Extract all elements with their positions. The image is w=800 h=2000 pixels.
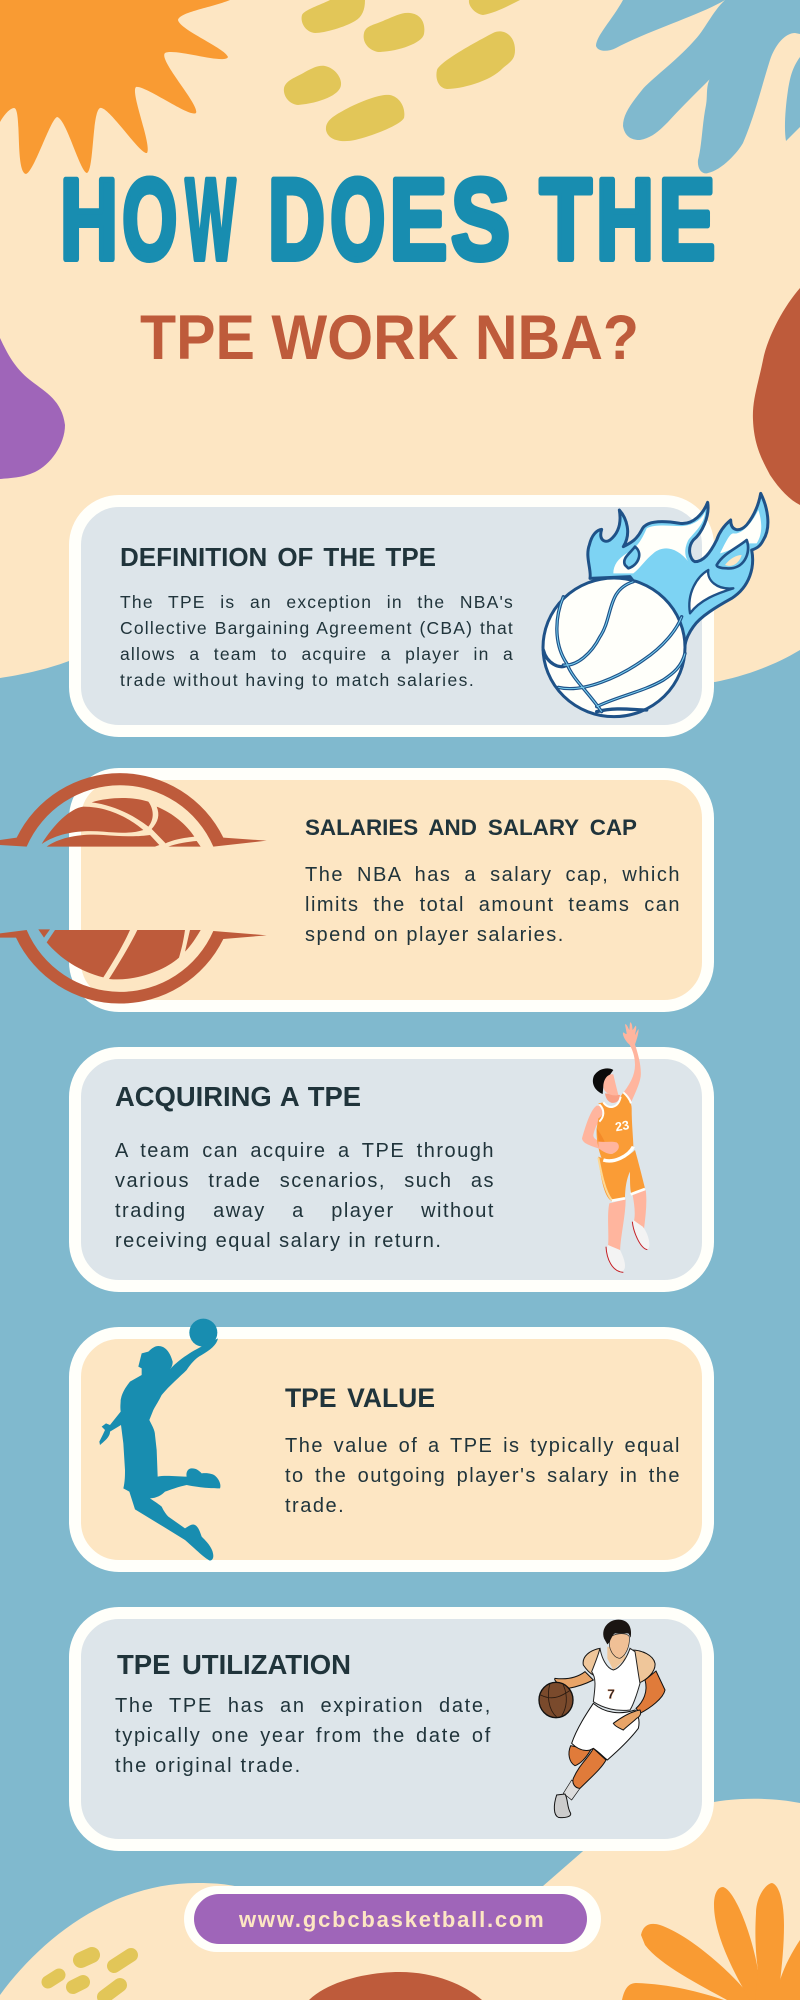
website url: www.gcbcbasketball.com <box>239 1906 546 1932</box>
panel: acquiring a TPE <box>69 1047 714 1292</box>
text block: allows a team to acquire a player in a <box>120 644 514 664</box>
heading: DEFINITION OF THE TPE <box>120 542 436 572</box>
jersey <box>597 1092 633 1159</box>
cream top background <box>0 0 800 682</box>
hand on hip <box>598 1142 619 1154</box>
title line one: H <box>60 156 118 284</box>
emblem ring top <box>0 773 267 847</box>
title line one: E <box>389 156 447 284</box>
ball silhouette <box>189 1319 217 1347</box>
front leg <box>573 1748 606 1788</box>
legs <box>608 1199 626 1251</box>
yellow pills bottom left <box>48 1955 131 1997</box>
cream bottom background <box>0 1799 800 2000</box>
neck <box>607 1647 626 1670</box>
panel: definition of the TPE <box>69 495 714 737</box>
back leg <box>569 1746 591 1766</box>
icon: player in orange jersey <box>570 1015 670 1285</box>
title line one: O <box>330 156 385 284</box>
text block: to the outgoing player's salary in the <box>285 1465 681 1487</box>
text block: The value of a TPE is typically equal <box>285 1435 681 1457</box>
title line two: TPE WORK NBA? <box>140 303 639 373</box>
text block <box>285 1431 681 1521</box>
shoes <box>607 1245 625 1272</box>
hand on hip <box>613 1710 641 1730</box>
title line one: D <box>268 156 325 284</box>
shoe <box>554 1794 571 1818</box>
heading: TPE UTILIZATION <box>117 1648 351 1680</box>
ball panels bottom <box>38 929 50 938</box>
jersey white <box>592 1648 640 1710</box>
shorts <box>572 1703 639 1760</box>
text block: receiving equal salary in return. <box>115 1230 442 1252</box>
sock <box>563 1780 580 1800</box>
text block: various trade scenarios, such as <box>115 1170 495 1192</box>
text block: The NBA has a salary cap, which <box>305 864 681 886</box>
heading: TPE VALUE <box>285 1383 435 1413</box>
text block: limits the total amount teams can <box>305 894 681 916</box>
ball <box>543 578 685 717</box>
panel: TPE utilization <box>69 1607 714 1851</box>
title line one: S <box>451 156 510 284</box>
text block <box>120 589 514 693</box>
hair <box>603 1620 631 1644</box>
arm sleeve <box>636 1671 665 1713</box>
text block <box>115 1691 492 1781</box>
forearm and hand on ball <box>555 1672 593 1688</box>
jersey number: 7 <box>607 1686 615 1701</box>
neck and head <box>605 1093 620 1103</box>
purple blob left <box>0 338 65 479</box>
yellow blobs top <box>284 0 520 141</box>
text block: Collective Bargaining Agreement (CBA) that <box>120 618 514 638</box>
icon: basketball emblem <box>0 765 280 1015</box>
text block <box>305 860 681 950</box>
website pill <box>184 1886 601 1952</box>
heading: ACQUIRING A TPE <box>115 1080 361 1112</box>
text block: A team can acquire a TPE through <box>115 1140 495 1162</box>
text block: The TPE is an exception in the NBA's <box>120 592 514 612</box>
body silhouette <box>99 1338 220 1561</box>
icon: flaming basketball <box>530 490 780 730</box>
emblem ring bottom <box>0 930 267 1004</box>
lower arm <box>582 1106 604 1148</box>
title line one: O <box>122 156 177 284</box>
title line one: E <box>658 156 715 284</box>
text block: trading away a player without <box>115 1200 495 1222</box>
panel: salaries and salary cap <box>69 768 714 1012</box>
raised arm <box>620 1022 641 1103</box>
icon: dribbling player <box>530 1615 670 1830</box>
text block: trade without having to match salaries. <box>120 670 475 690</box>
text block: typically one year from the date of <box>115 1725 492 1747</box>
text block: spend on player salaries. <box>305 924 565 946</box>
ball panels top <box>42 807 143 844</box>
title line one <box>60 156 715 284</box>
shoulders <box>583 1648 600 1675</box>
website pill inner <box>194 1894 587 1944</box>
face <box>609 1634 629 1658</box>
ball seams <box>543 582 685 712</box>
title <box>40 160 740 370</box>
blue leaf top right <box>596 0 800 173</box>
basketball <box>539 1682 573 1718</box>
shorts <box>598 1150 645 1202</box>
title line one: H <box>596 156 654 284</box>
title line one: W <box>186 156 236 284</box>
orange petals bottom right <box>622 1883 800 2000</box>
text block: the original trade. <box>115 1755 302 1777</box>
orange sun <box>0 0 230 174</box>
flames <box>588 493 768 647</box>
text block: trade. <box>285 1495 345 1517</box>
jersey number: 23 <box>614 1118 630 1134</box>
rust blob right <box>753 288 800 505</box>
heading: SALARIES AND SALARY CAP <box>305 815 637 840</box>
text block <box>115 1136 495 1256</box>
icon: jumping player silhouette <box>90 1310 230 1570</box>
text block: The TPE has an expiration date, <box>115 1695 492 1717</box>
panel: TPE value <box>69 1327 714 1572</box>
title line one: T <box>540 156 592 284</box>
rust hump bottom <box>309 1972 482 2000</box>
